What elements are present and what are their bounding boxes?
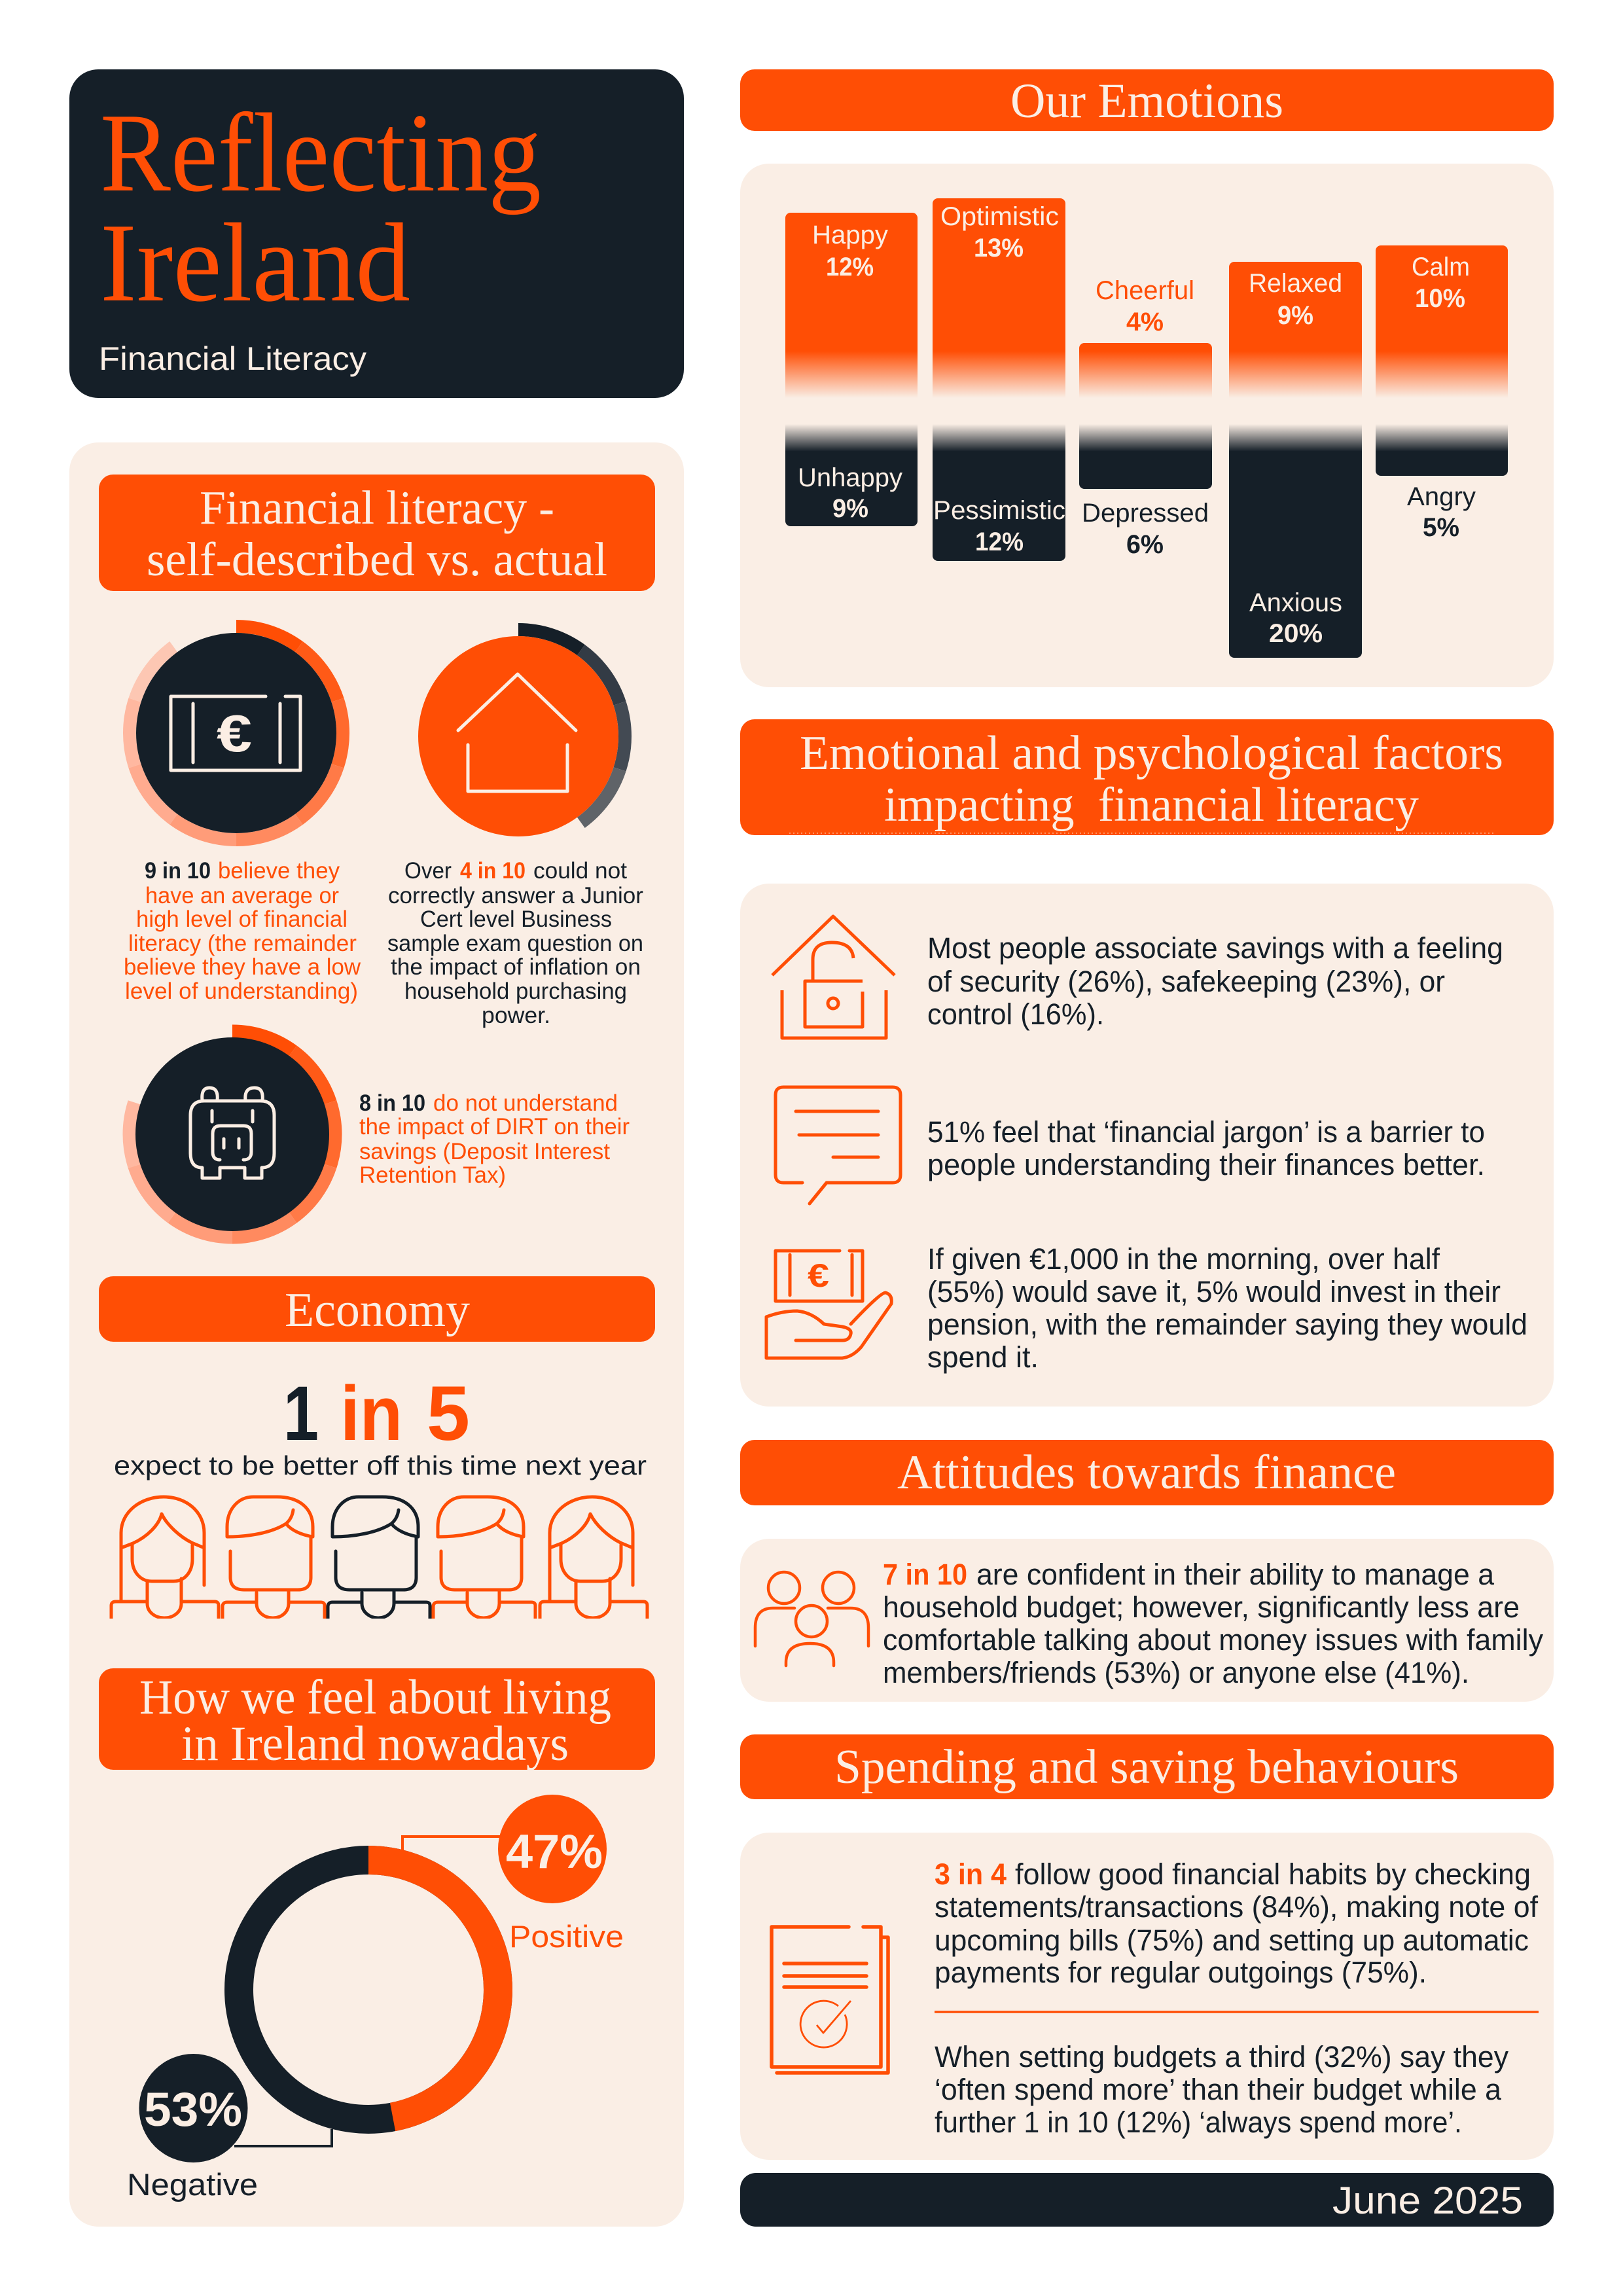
text: 9 in 10: 9 in 10 bbox=[145, 858, 211, 884]
text: 7 in 10: members/friends (53%) or anyone else (41%). bbox=[883, 1656, 1469, 1689]
text: 3 in 4: 3 in 4 bbox=[935, 1857, 1007, 1891]
person 4 bbox=[433, 1497, 535, 1623]
bar: relaxed / anxious: Relaxed bbox=[1249, 269, 1342, 298]
bar: happy / unhappy: Happy bbox=[812, 221, 888, 249]
text: 9 in 10 bbox=[124, 858, 361, 1004]
bar: happy / unhappy bbox=[785, 213, 918, 526]
bar: calm / angry: Calm bbox=[1412, 253, 1470, 281]
text: 3 in 4: follow good financial habits by checking bbox=[1015, 1857, 1531, 1891]
bar: cheerful / depressed: 6% bbox=[1126, 530, 1164, 559]
panel: left column bbox=[69, 442, 684, 2227]
bar: happy / unhappy: 9% bbox=[832, 494, 868, 523]
text: 4 in 10: correctly answer a Junior bbox=[388, 883, 643, 908]
text: budgets: further 1 in 10 (12%) ‘always spend more’. bbox=[935, 2106, 1462, 2139]
icon: euro note in ring, 9 in 10 bbox=[87, 584, 385, 882]
text: budgets: ‘often spend more’ than their budget while a bbox=[935, 2073, 1502, 2106]
icon: euro note in ring, 9 in 10: € bbox=[217, 704, 252, 762]
text: 3 in 4 bbox=[935, 1857, 1538, 1989]
bar: relaxed / anxious: 9% bbox=[1277, 301, 1313, 330]
callout: 47% positive: Positive bbox=[509, 1919, 624, 1954]
bar: optimistic / pessimistic: Optimistic bbox=[940, 202, 1059, 231]
text: 7 in 10: are confident in their ability to manage a bbox=[976, 1558, 1495, 1591]
bar: happy / unhappy: Unhappy bbox=[798, 463, 902, 492]
footer: date bbox=[740, 2173, 1554, 2227]
text: 4 in 10: sample exam question on bbox=[387, 931, 643, 956]
text: savings: control (16%). bbox=[927, 997, 1104, 1031]
icon: piggy bank in ring, 8 in 10 bbox=[88, 990, 376, 1278]
donut chart: positive vs negative bbox=[127, 1795, 624, 2202]
heading: how we feel: How we feel about living bbox=[139, 1670, 611, 1725]
text: jargon: 51% feel that ‘financial jargon’ is a barrier to bbox=[927, 1115, 1485, 1149]
text: 4 in 10: could not bbox=[533, 858, 627, 884]
text: given 1000: (55%) would save it, 5% would invest in their bbox=[927, 1275, 1501, 1308]
heading: our emotions: Our Emotions bbox=[1010, 74, 1283, 128]
text: 9 in 10: high level of financial bbox=[136, 906, 348, 932]
heading: financial literacy: Financial literacy - bbox=[200, 481, 554, 534]
heading: financial literacy: self-described vs. actual bbox=[147, 533, 607, 586]
text: jargon bbox=[927, 1115, 1485, 1181]
text: 3 in 4: statements/transactions (84%), making note of bbox=[935, 1890, 1538, 1924]
callout: 53% negative: 53% bbox=[144, 2083, 242, 2136]
heading: how we feel: in Ireland nowadays bbox=[181, 1717, 569, 1771]
title block bbox=[69, 69, 684, 398]
bar: cheerful / depressed bbox=[1079, 276, 1212, 559]
bar: optimistic / pessimistic: 12% bbox=[975, 528, 1024, 556]
heading: financial literacy bbox=[99, 475, 655, 591]
icon: hand holding euro note: € bbox=[808, 1257, 829, 1294]
bar: cheerful / depressed: Depressed bbox=[1082, 499, 1209, 528]
heading: spending and saving behaviours: Spending and saving behaviours bbox=[834, 1740, 1459, 1794]
footer: date: June 2025 bbox=[1332, 2179, 1523, 2222]
heading: economy bbox=[99, 1276, 655, 1342]
icon: house with padlock bbox=[772, 916, 895, 1038]
heading: emotional and psychological factors: Emotional and psychological factors bbox=[800, 726, 1503, 780]
text: savings: Most people associate savings with a feeling bbox=[927, 931, 1503, 965]
callout: 53% negative: Negative bbox=[127, 2167, 258, 2202]
icon: row of five people bbox=[111, 1497, 647, 1623]
bar: optimistic / pessimistic: Pessimistic bbox=[933, 496, 1065, 525]
text: 9 in 10: literacy (the remainder bbox=[128, 931, 357, 956]
text: 7 in 10 bbox=[883, 1558, 1543, 1689]
text: given 1000: spend it. bbox=[927, 1340, 1039, 1374]
bar: optimistic / pessimistic bbox=[933, 198, 1065, 561]
icon: house in ring, 4 in 10 bbox=[369, 587, 668, 886]
heading: economy: Economy bbox=[285, 1283, 470, 1337]
text: 8 in 10: the impact of DIRT on their bbox=[359, 1114, 630, 1139]
heading: our emotions bbox=[740, 69, 1554, 131]
bar: relaxed / anxious bbox=[1229, 262, 1362, 658]
icon: hand holding euro note bbox=[766, 1251, 891, 1358]
bar: calm / angry bbox=[1376, 245, 1508, 542]
text: budgets bbox=[935, 2040, 1508, 2139]
text: 8 in 10: do not understand bbox=[433, 1090, 618, 1116]
stat: 1 in 5: expect to be better off this time next year bbox=[114, 1450, 647, 1480]
text: 9 in 10: believe they bbox=[218, 858, 340, 884]
callout: 53% negative bbox=[127, 2054, 332, 2202]
text: given 1000: pension, with the remainder saying they would bbox=[927, 1308, 1527, 1341]
bar: calm / angry: 10% bbox=[1415, 284, 1465, 313]
text: 8 in 10: 8 in 10 bbox=[359, 1090, 425, 1116]
panel: spending bbox=[740, 1833, 1554, 2160]
title block: Financial Literacy bbox=[99, 340, 366, 377]
text: given 1000: If given €1,000 in the morning, over half bbox=[927, 1242, 1440, 1276]
text: 7 in 10: 7 in 10 bbox=[883, 1558, 967, 1591]
title block: Ireland bbox=[100, 201, 410, 325]
text: 4 in 10: the impact of inflation on bbox=[391, 954, 641, 980]
icon: document with tick bbox=[772, 1927, 888, 2073]
person 5 bbox=[540, 1497, 647, 1623]
bar: optimistic / pessimistic: 13% bbox=[974, 234, 1024, 262]
text: 7 in 10: comfortable talking about money issues with family bbox=[883, 1623, 1543, 1657]
stat: 1 in 5: 5 bbox=[427, 1371, 470, 1457]
bar: relaxed / anxious: 20% bbox=[1269, 619, 1323, 648]
stat: 1 in 5: 1 bbox=[283, 1371, 319, 1457]
bar: cheerful / depressed: Cheerful bbox=[1096, 276, 1194, 305]
bar: happy / unhappy: 12% bbox=[826, 253, 874, 281]
text: 4 in 10: household purchasing bbox=[404, 978, 627, 1004]
text: 3 in 4: payments for regular outgoings (75%). bbox=[935, 1956, 1427, 1989]
heading: attitudes towards finance: Attitudes towards finance bbox=[897, 1446, 1396, 1499]
text: 4 in 10: Cert level Business bbox=[420, 906, 612, 932]
panel: emotional factors bbox=[740, 884, 1554, 1407]
heading: attitudes towards finance bbox=[740, 1440, 1554, 1505]
stat: 1 in 5: in bbox=[340, 1371, 402, 1457]
heading: emotional and psychological factors: impacting financial literacy bbox=[884, 778, 1419, 832]
text: 8 in 10: Retention Tax) bbox=[359, 1162, 506, 1188]
text: savings bbox=[927, 931, 1503, 1031]
heading: emotional and psychological factors bbox=[740, 719, 1554, 835]
icon: three people bbox=[755, 1572, 868, 1666]
callout: 47% positive: 47% bbox=[506, 1825, 603, 1878]
title block: Reflecting bbox=[100, 91, 541, 215]
text: 3 in 4: upcoming bills (75%) and setting up automatic bbox=[935, 1924, 1529, 1957]
icon: speech bubble bbox=[776, 1087, 901, 1204]
text: jargon: people understanding their finances better. bbox=[927, 1148, 1485, 1181]
bar: cheerful / depressed: 4% bbox=[1126, 308, 1164, 336]
text: 8 in 10 bbox=[359, 1090, 630, 1188]
text: 4 in 10: 4 in 10 bbox=[460, 858, 526, 884]
callout: 47% positive bbox=[402, 1795, 624, 1954]
text: 9 in 10: believe they have a low bbox=[124, 954, 361, 980]
text: savings: of security (26%), safekeeping (23%), or bbox=[927, 965, 1445, 998]
person 3, highlighted bbox=[328, 1497, 430, 1623]
panel: emotions bar chart bbox=[740, 164, 1554, 687]
text: 4 in 10: power. bbox=[482, 1003, 550, 1028]
stat: 1 in 5 bbox=[114, 1371, 647, 1480]
text: 8 in 10: savings (Deposit Interest bbox=[359, 1139, 610, 1164]
bar: calm / angry: 5% bbox=[1423, 513, 1459, 542]
text: 4 in 10 bbox=[387, 858, 643, 1028]
text: 9 in 10: have an average or bbox=[145, 883, 339, 908]
text: 4 in 10: Over bbox=[404, 858, 452, 884]
person 1 bbox=[111, 1497, 219, 1623]
person 2 bbox=[223, 1497, 325, 1623]
text: 7 in 10: household budget; however, significantly less are bbox=[883, 1590, 1520, 1624]
heading: spending and saving behaviours bbox=[740, 1734, 1554, 1799]
heading: how we feel bbox=[99, 1668, 655, 1771]
bar: relaxed / anxious: Anxious bbox=[1249, 588, 1342, 617]
text: 9 in 10: level of understanding) bbox=[125, 978, 358, 1004]
text: budgets: When setting budgets a third (32%) say they bbox=[935, 2040, 1508, 2073]
panel: attitudes bbox=[740, 1539, 1554, 1702]
text: given 1000 bbox=[927, 1242, 1527, 1374]
bar: calm / angry: Angry bbox=[1407, 482, 1476, 511]
